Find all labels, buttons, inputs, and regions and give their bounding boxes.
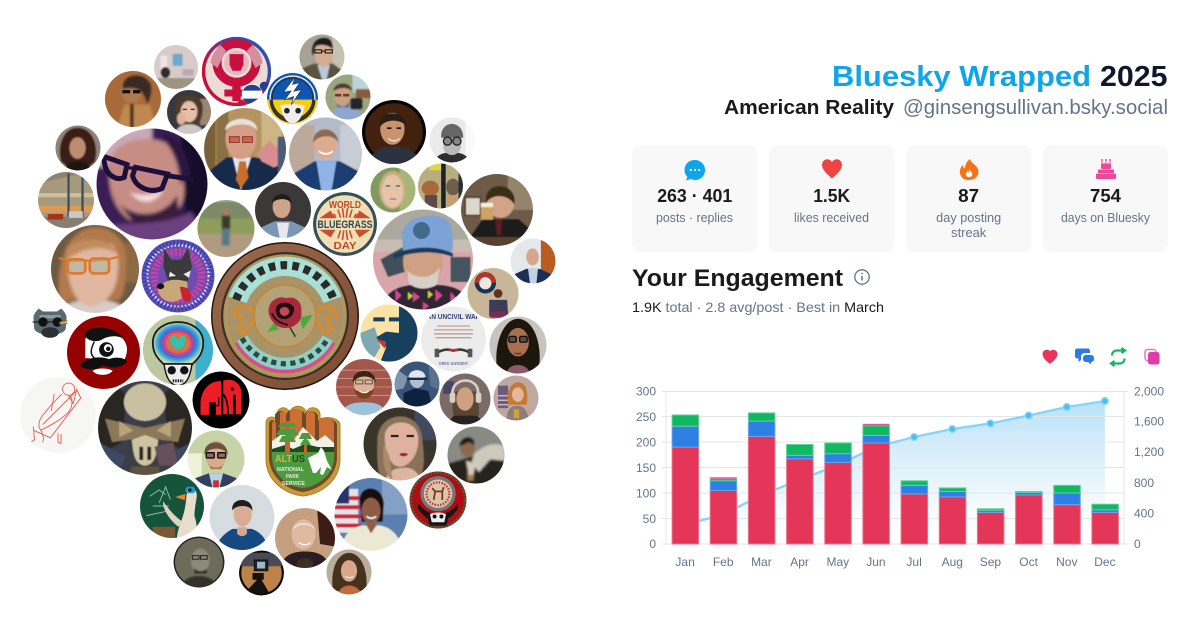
avatar: man in sunglasses and tan coat (105, 71, 161, 127)
left axis labels: 250 (636, 410, 656, 424)
avatar: World Bluegrass Day logo (313, 192, 377, 256)
month labels: Aug (942, 555, 963, 569)
right axis labels: 800 (1134, 476, 1154, 490)
left axis labels: 0 (649, 537, 656, 551)
avatar: smiling woman with curly hair (324, 547, 374, 597)
avatar: man on dark background with black border (362, 100, 426, 166)
bar: Feb (710, 477, 737, 544)
month labels: May (826, 555, 849, 569)
icon: chat bubble (685, 160, 705, 180)
subtitle: display name and handle (724, 97, 1168, 119)
avatar: Chuck Schumer pointing (204, 108, 286, 190)
bar: Jan (672, 415, 699, 544)
avatar: woman in headphones (437, 371, 493, 427)
month labels: Nov (1056, 555, 1077, 569)
avatar: Ron Wyden in blue jacket (289, 118, 362, 190)
month labels: Apr (790, 555, 809, 569)
avatar: Steal Your Face with rainbow heart (143, 315, 216, 386)
month labels: Feb (713, 555, 734, 569)
subtitle: display name and handle: American Reality (724, 97, 895, 119)
stat label: posts · replies (656, 211, 733, 225)
bar: Dec (1092, 504, 1118, 544)
avatar: Alt US National Park Service badge (266, 406, 340, 496)
avatar: cat with rainbow sunglasses (32, 308, 68, 338)
avatar: two dogs (418, 164, 463, 208)
avatar: black and white helmet and goggles (430, 118, 467, 162)
avatar: bald man in navy blazer (510, 238, 556, 284)
avatar: monochrome blue man in hat (392, 359, 442, 409)
avatar: woman hand on face (167, 90, 211, 134)
avatar: large smiling man with glasses, purple tint (96, 128, 208, 240)
month labels: Jul (906, 555, 922, 569)
left axis labels: 200 (636, 436, 656, 450)
avatar: man in blue blazer (255, 182, 311, 238)
avatar: red Steal Your Face holiday design (410, 472, 466, 528)
grid lines (662, 391, 1128, 544)
icon: repost legend (1111, 348, 1125, 366)
avatar: man with glasses in suit (300, 34, 344, 80)
avatar: woman selfie with blonde hair (360, 404, 440, 484)
right axis labels: 1,600 (1134, 414, 1164, 428)
icon: birthday cake (1096, 159, 1116, 179)
right axis labels: 1,200 (1134, 445, 1164, 459)
avatar: building with New York Times facade (38, 172, 94, 228)
left axis labels: 150 (636, 461, 656, 475)
avatar: book cover An Uncivil War: GREG SARGENT (439, 361, 468, 367)
stat value: 263 · 401 (657, 186, 732, 206)
bar: Jul (901, 481, 928, 544)
stat value: 87 (958, 186, 979, 206)
panel: avatar bubble cluster (20, 32, 558, 597)
bar: Oct (1016, 492, 1042, 544)
month labels: Jun (866, 555, 886, 569)
avatar: raised fist venus symbol with vote badge (202, 37, 271, 107)
avatar: American Beauty Grateful Dead album art (211, 242, 359, 390)
avatar: blond man with dark brick background (333, 356, 395, 418)
cumulative line (685, 398, 1108, 525)
avatar: Alt US National Park Service badge: ALT (275, 453, 292, 465)
avatar: street scene with bike (154, 45, 198, 89)
legend icons (1042, 348, 1160, 366)
avatar: figurine with Steal Your Face balloon (468, 268, 518, 319)
stat label: likes received (794, 211, 869, 225)
chart: monthly engagement stacked bars and cumulative line (636, 384, 1164, 569)
left axis labels: 100 (636, 486, 656, 500)
avatar: Alt US National Park Service badge: NATIONAL (277, 467, 305, 473)
right axis labels: 2,000 (1134, 384, 1164, 398)
bar: Jun (863, 424, 889, 544)
avatar: Alt US National Park Service badge: PARK (286, 474, 299, 480)
avatar: man in blue t-shirt (210, 485, 274, 550)
avatar: woman with glasses and long curly hair (490, 316, 546, 374)
avatar: man reclining in dark coat (445, 424, 507, 486)
bar: Mar (748, 413, 775, 544)
month labels: Sep (980, 555, 1001, 569)
bar: Sep (977, 509, 1004, 544)
month labels: Oct (1019, 555, 1039, 569)
stat value: 1.5K (813, 186, 850, 206)
avatar: steal your face in Ukraine colors (267, 73, 318, 125)
month labels: Dec (1094, 555, 1116, 569)
panel: stat card day posting streak (906, 145, 1032, 252)
cumulative area (685, 401, 1105, 544)
bar: Nov (1054, 485, 1080, 544)
avatar: man standing in green field (198, 200, 254, 257)
panel: stat card posts and replies (632, 145, 758, 252)
icon: replies legend (1075, 348, 1094, 364)
avatar: Alt US National Park Service badge: US (292, 453, 305, 465)
avatar: red line sketch of a reclining figure (20, 377, 96, 453)
avatar: man with glasses and camera (326, 74, 370, 120)
bar: May (825, 443, 851, 544)
left axis labels: 300 (636, 384, 656, 398)
avatar: skull with moths collage (98, 381, 192, 475)
icon: heart legend (1042, 350, 1058, 364)
stat label: day posting (936, 211, 1001, 225)
avatar: heavyset man holding a beer mug (461, 174, 533, 246)
icon: info (855, 270, 869, 284)
avatar: Natty Boh mustache logo on dark red (67, 316, 140, 389)
icon: quote legend (1145, 350, 1160, 364)
title: Bluesky Wrapped (832, 61, 1091, 93)
avatar: bearded older man in sepia (174, 536, 224, 588)
stat label second line: streak (951, 226, 987, 240)
icon: heart (822, 159, 842, 178)
panel: stat card likes received (769, 145, 894, 252)
month labels (675, 555, 1116, 569)
avatar: girl with red hair and flag (491, 373, 541, 423)
bar: Apr (787, 444, 813, 544)
avatar: stylized poster portrait (360, 304, 418, 362)
avatar: World Bluegrass Day logo: WORLD (329, 200, 361, 211)
avatar: Alt US National Park Service badge: SERVICE (282, 481, 305, 487)
avatar: woman with orange glasses (51, 225, 139, 313)
avatar: World Bluegrass Day logo: BLUEGRASS (317, 219, 373, 231)
avatar: camera on tripod with monitor (239, 550, 284, 596)
icon: flame (960, 159, 978, 180)
avatar: World Bluegrass Day logo: DAY (333, 241, 357, 252)
avatar: man with red tie and glasses (188, 430, 244, 488)
avatar: book cover An Uncivil War (421, 306, 486, 372)
avatar: man in blue cap and floral shirt (373, 210, 473, 310)
right axis labels: 400 (1134, 506, 1154, 520)
avatar: cartoon wolf with hypnotic background (142, 240, 214, 312)
stat value: 754 (1090, 186, 1121, 206)
right axis labels (1134, 384, 1164, 551)
heading: Your Engagement: Your Engagement (632, 265, 843, 292)
right axis labels: 0 (1134, 537, 1141, 551)
stat label: days on Bluesky (1061, 211, 1151, 225)
month labels: Mar (751, 555, 772, 569)
bar: Aug (939, 488, 966, 544)
subtitle: display name and handle: @ginsengsullivan.bsky.social (903, 97, 1168, 119)
text: engagement summary: 1.9K total · 2.8 avg/post · Best in March (632, 299, 884, 315)
left axis labels (636, 384, 656, 551)
left axis labels: 50 (643, 512, 656, 526)
avatar: blonde woman, green tint (370, 168, 416, 212)
panel: stat card days on Bluesky (1043, 145, 1168, 252)
avatar: book cover An Uncivil War: AN UNCIVIL WAR (427, 313, 481, 321)
avatar: bald man with microphone (275, 508, 335, 568)
title: 2025 (1100, 61, 1168, 93)
avatar: woman with curly dark hair (56, 126, 100, 170)
avatar: woman with American flag (331, 474, 411, 555)
month labels: Jan (675, 555, 695, 569)
avatar: red elephant on black (192, 372, 250, 428)
avatar: goose at chalkboard (140, 474, 204, 538)
